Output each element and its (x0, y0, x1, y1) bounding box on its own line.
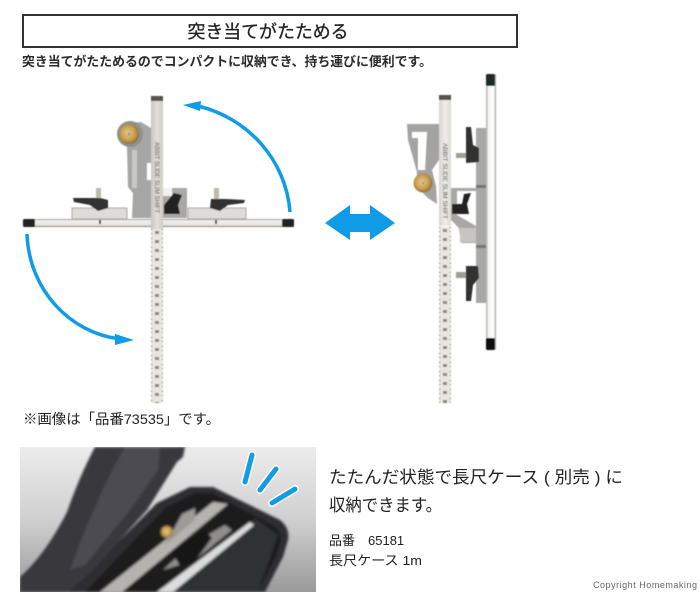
center black knob (164, 193, 182, 214)
copyright: Copyright Homemaking (593, 580, 697, 590)
description text: 収納できます。 (329, 496, 442, 515)
photo: tool stored in case (20, 447, 316, 592)
slider blocks (72, 208, 127, 219)
right thumb screw (210, 188, 245, 211)
vertical ruler: ABBIT SLIDE SLIM SHIFT (441, 143, 447, 219)
product number: 品番 (329, 533, 355, 548)
image note: ※画像は「品番73535」です。 (23, 411, 220, 427)
vertical ruler (151, 96, 163, 403)
stored ruler (100, 502, 228, 592)
vertical ruler: ABBIT SLIDE SLIM SHIFT (153, 142, 159, 213)
heading box: 突き当てがたためる (188, 22, 348, 42)
center plate (451, 188, 476, 243)
horizontal bar (24, 219, 294, 227)
case lid (20, 447, 185, 592)
black knob cluster (172, 530, 212, 566)
inner pocket (173, 518, 278, 592)
product number: 長尺ケース 1m (329, 553, 422, 568)
product number: 65181 (368, 533, 404, 548)
tool: folded square (407, 74, 496, 403)
center black knob (452, 193, 471, 214)
bracket with brass knob (117, 121, 151, 218)
description text: たたんだ状態で長尺ケース ( 別売 ) に (329, 468, 623, 487)
open case (68, 487, 288, 592)
vertical ruler (439, 95, 451, 403)
tool: unfolded square (23, 96, 294, 403)
stored rail (157, 522, 254, 592)
subtitle text: 突き当てがたためるのでコンパクトに収納でき、持ち運びに便利です。 (22, 54, 432, 69)
hook plate and brass knob (407, 124, 439, 204)
bar end caps (23, 219, 294, 227)
icon: blue accent marks (245, 455, 295, 503)
double arrow (325, 205, 395, 240)
rear grey bar (476, 128, 486, 303)
folded rail (486, 74, 496, 350)
arrow: folding up (183, 101, 290, 212)
lower thumb screw (456, 266, 479, 301)
arrow: folding down (27, 234, 134, 345)
upper thumb screw (456, 127, 479, 163)
left thumb screw (73, 188, 108, 211)
product number (329, 533, 422, 568)
heading box (23, 15, 517, 47)
center block (163, 188, 187, 218)
description text (329, 468, 623, 515)
